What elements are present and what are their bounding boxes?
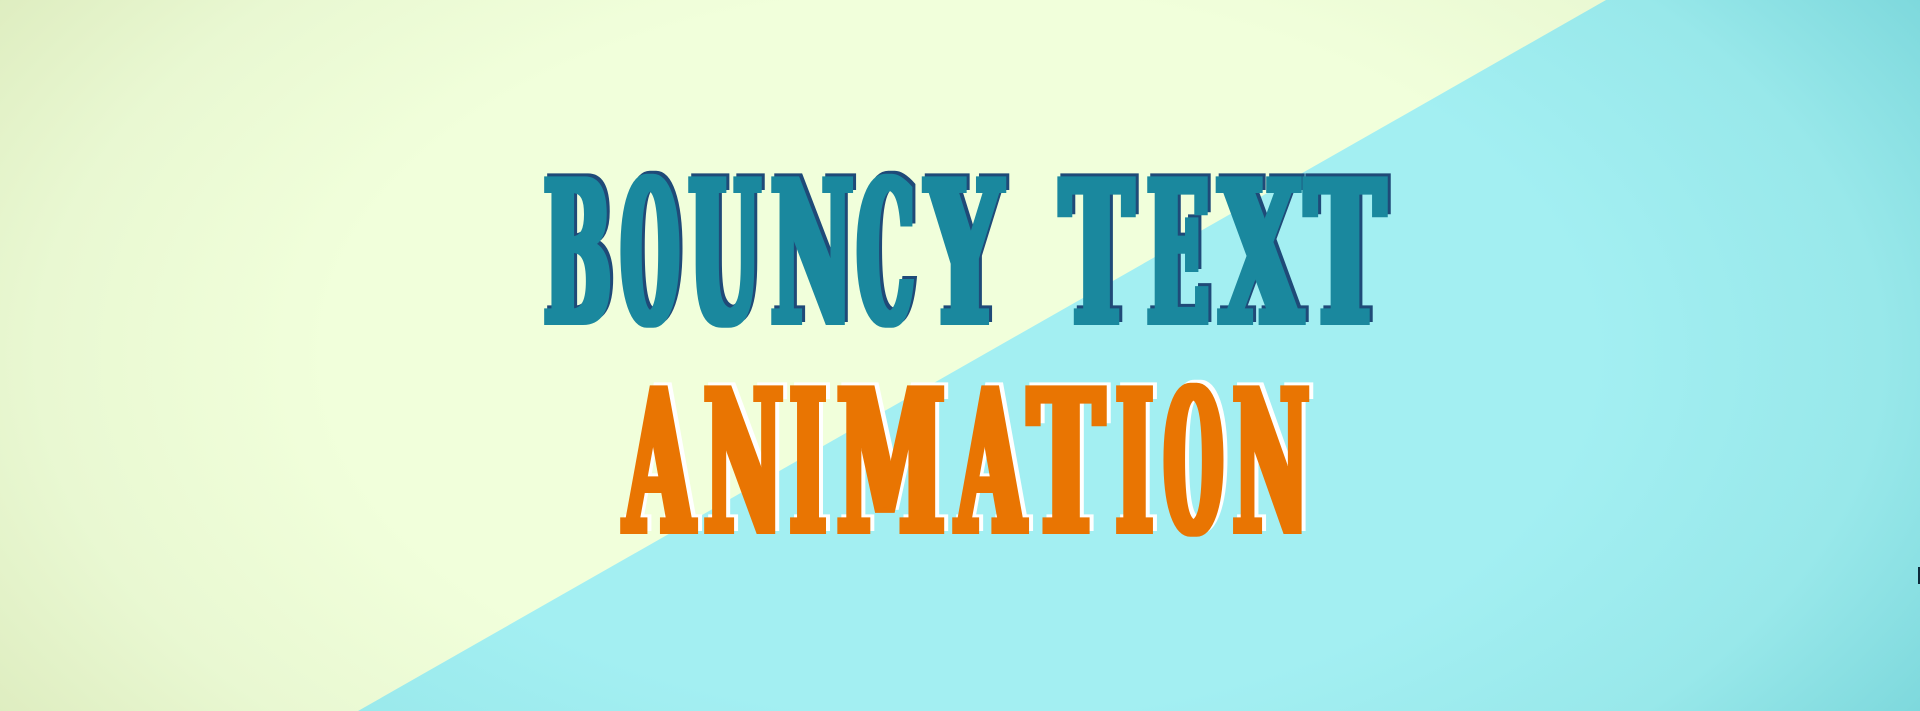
title: BOUNCY TEXT: N [772,138,852,370]
title: ANIMATION: I [790,348,826,578]
title: BOUNCY TEXT: T [1060,138,1132,370]
title: BOUNCY TEXT: C [858,138,914,370]
title: BOUNCY TEXT: X [1220,138,1302,370]
title: ANIMATION: T [1028,348,1104,578]
title: ANIMATION: I [1116,348,1152,578]
text: N [1234,348,1308,578]
title: ANIMATION [624,348,1308,578]
title: ANIMATION: O [1164,348,1222,578]
title: BOUNCY TEXT: E [1148,138,1208,370]
title: ANIMATION: N [704,348,782,578]
small dark edge mark [1918,567,1920,584]
title: BOUNCY TEXT: Y [926,138,1002,370]
title: ANIMATION: A [624,348,694,578]
title: BOUNCY TEXT: O [622,138,678,370]
title: BOUNCY TEXT: B [544,138,610,370]
title: BOUNCY TEXT [544,138,1384,370]
title: ANIMATION: M [838,348,944,578]
title: BOUNCY TEXT: T [1306,138,1384,370]
title: BOUNCY TEXT: U [690,138,760,370]
title: ANIMATION: A [956,348,1025,578]
